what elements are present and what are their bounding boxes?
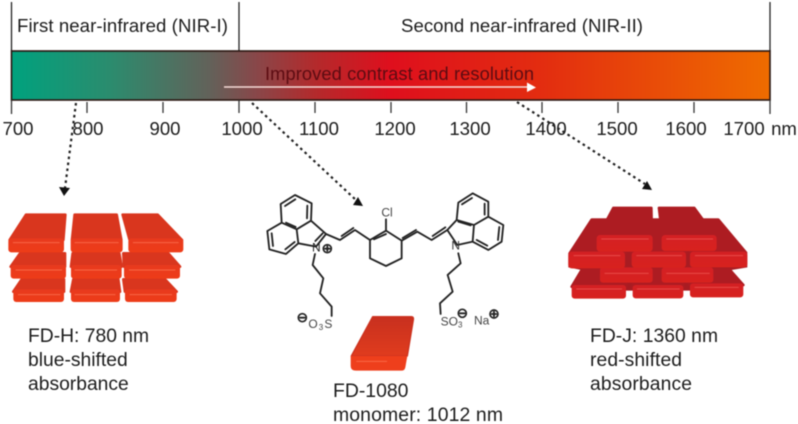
sulfonate chains: O: [308, 317, 318, 331]
sulfonate chains: S: [324, 317, 332, 331]
FD-H caption: absorbance: [28, 374, 129, 395]
FD-1080 caption: FD-1080: [333, 380, 409, 402]
axis tick labels: 1300: [449, 118, 491, 139]
axis tick labels: [2, 118, 797, 139]
axis tick labels: nm: [771, 118, 797, 139]
left benzoindole rings: [267, 195, 326, 254]
axis tick labels: 1500: [596, 118, 638, 139]
axis tick labels: 1100: [299, 118, 339, 139]
axis tick labels: 900: [149, 118, 181, 139]
sulfonate chains: Na: [474, 314, 490, 328]
FD-J brick aggregate icon: [568, 208, 747, 299]
right benzoindole rings: [447, 193, 503, 250]
polymethine bridge and cyclohexene ring: [326, 219, 447, 266]
FD-H caption: [28, 326, 149, 395]
axis tick labels: 1200: [374, 118, 416, 139]
FD-H caption: FD-H: 780 nm: [28, 326, 149, 347]
nitrogen labels: N: [312, 240, 321, 254]
spectrum header: NIR-I and NIR-II regions: [12, 2, 770, 51]
nitrogen labels: [312, 238, 460, 254]
axis tick labels: 1400: [525, 118, 567, 139]
FD-J caption: FD-J: 1360 nm: [590, 326, 718, 347]
arrow: 1360 nm to FD-J: [517, 102, 652, 190]
axis tick labels: 800: [72, 118, 104, 139]
axis tick labels: 1000: [221, 118, 263, 139]
arrow: 780 nm to FD-H: [59, 103, 76, 196]
nitrogen labels: N: [451, 238, 460, 252]
chlorine label: Cl: [381, 206, 393, 220]
label: first near-infrared: First near-infrared (NIR-I): [17, 15, 228, 36]
sulfonate chains: 3: [319, 323, 324, 332]
FD-1080 chemical structure: [267, 193, 503, 332]
sulfonate chains: [298, 253, 498, 332]
axis tick labels: 700: [2, 118, 34, 139]
label: second near-infrared: Second near-infrared (NIR-II): [401, 15, 643, 36]
FD-H stacked aggregate icon: [8, 215, 183, 302]
FD-J caption: absorbance: [590, 374, 692, 395]
axis tick labels: 1600: [665, 118, 707, 139]
spectrum gradient bar: [12, 51, 770, 100]
arrow: improved direction: [224, 82, 536, 92]
sulfonate chains: 3: [458, 320, 463, 329]
FD-1080 monomer block icon: [351, 317, 413, 371]
FD-1080 caption: [333, 380, 503, 424]
axis tick labels: 1700: [723, 118, 765, 139]
caption: improved contrast and resolution: Improved contrast and resolution: [265, 63, 534, 84]
FD-J caption: red-shifted: [590, 350, 682, 371]
FD-H caption: blue-shifted: [28, 350, 128, 371]
FD-J caption: [590, 326, 718, 395]
wavelength axis: [2, 100, 797, 139]
sulfonate chains: SO: [441, 314, 458, 328]
arrow: 1012 nm to FD-1080: [252, 103, 363, 206]
